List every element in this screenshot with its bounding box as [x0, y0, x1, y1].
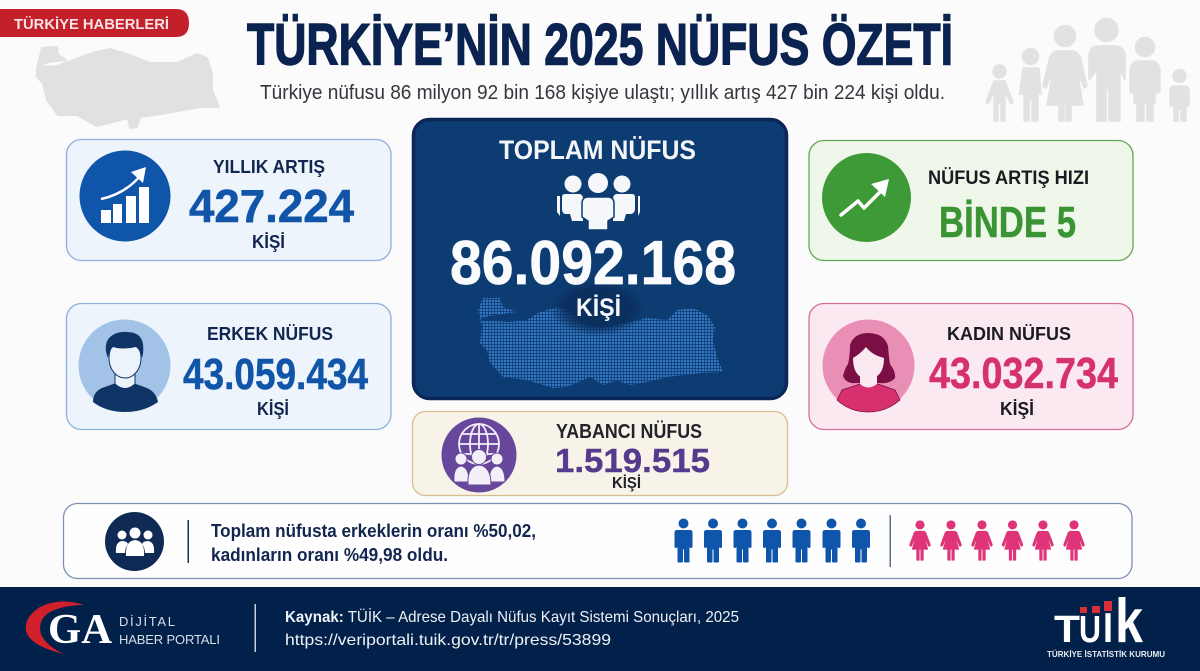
logo: GA Dijital Haber Portalı [26, 601, 220, 654]
panel: nüfus artış hızı: BİNDE 5 [939, 198, 1076, 247]
panel: kadın nüfus: KADIN NÜFUS [947, 324, 1071, 344]
icon: people in circle [105, 512, 164, 571]
panel: erkek nüfus: 43.059.434 [183, 350, 368, 399]
ratio text: Toplam nüfusta erkeklerin oranı %50,02, [211, 521, 536, 541]
source text [285, 607, 739, 649]
female pictograms [909, 520, 1085, 561]
decorative grey Turkey map [37, 47, 219, 128]
logo: TÜİK: I [1103, 604, 1113, 651]
badge: Türkiye Haberleri: TÜRKİYE HABERLERİ [14, 16, 169, 33]
logo: TÜİK: TÜRKİYE İSTATİSTİK KURUMU [1047, 649, 1165, 659]
panel: yıllık artış: YILLIK ARTIŞ [213, 157, 325, 177]
logo: GA Dijital Haber Portalı: HABER PORTALI [119, 632, 220, 647]
panel: erkek nüfus [66, 304, 391, 430]
logo: TÜİK: U [1079, 609, 1101, 651]
panel: yıllık artış: KİŞİ [252, 232, 285, 252]
icon: rising bar chart [80, 150, 170, 242]
panel: yabancı nüfus: 1.519.515 [555, 442, 710, 479]
badge: Türkiye Haberleri [0, 9, 189, 37]
ratio text: kadınların oranı %49,98 oldu. [211, 545, 448, 565]
logo: GA Dijital Haber Portalı: GA [48, 607, 113, 653]
panel: kadın nüfus: 43.032.734 [929, 349, 1118, 398]
ratio text [211, 521, 536, 565]
icon: three people [557, 173, 640, 230]
source text: https://veriportali.tuik.gov.tr/tr/press/53899 [285, 632, 611, 649]
title: TÜRKİYE’NİN 2025 NÜFUS ÖZETİ [247, 12, 953, 78]
subtitle: Türkiye nüfusu 86 milyon 92 bin 168 kişiye ulaştı; yıllık artış 427 bin 224 kişi oldu. [260, 82, 945, 104]
panel: erkek nüfus: KİŞİ [257, 399, 289, 419]
icon: woman avatar [822, 320, 914, 412]
dotted Turkey map [478, 298, 723, 388]
panel: yabancı nüfus: KİŞİ [612, 474, 641, 492]
panel: nüfus artış hızı: NÜFUS ARTIŞ HIZI [928, 168, 1089, 189]
source text: Kaynak: TÜİK – Adrese Dayalı Nüfus Kayıt Sistemi Sonuçları, 2025 [285, 607, 739, 626]
panel: yabancı nüfus [412, 412, 788, 496]
panel: toplam nüfus [414, 120, 786, 398]
icon: man avatar [78, 320, 170, 412]
icon: growth arrow [822, 153, 911, 242]
panel: kadın nüfus [809, 304, 1133, 430]
panel: yıllık artış [66, 140, 391, 260]
panel: kadın nüfus: KİŞİ [1000, 399, 1034, 419]
panel: erkek nüfus: ERKEK NÜFUS [207, 324, 333, 344]
icon: globe with people [442, 418, 516, 492]
panel: yıllık artış: 427.224 [189, 180, 354, 232]
logo: TÜİK: T [1054, 609, 1080, 651]
panel: yabancı nüfus: YABANCI NÜFUS [556, 420, 702, 443]
logo: TÜİK: k [1115, 587, 1143, 656]
footer [0, 587, 1200, 671]
logo: GA Dijital Haber Portalı: DİJİTAL [119, 614, 175, 629]
logo: TÜİK [1047, 587, 1165, 659]
male pictograms [674, 518, 870, 562]
panel: toplam nüfus: 86.092.168 [450, 229, 736, 298]
icon: grey family silhouettes [986, 18, 1189, 121]
dark glow behind kişi [550, 280, 646, 336]
panel: toplam nüfus: KİŞİ [576, 294, 621, 322]
panel: nüfus artış hızı [809, 140, 1133, 260]
panel: gender ratio bar [64, 504, 1132, 578]
panel: toplam nüfus: TOPLAM NÜFUS [499, 135, 696, 165]
